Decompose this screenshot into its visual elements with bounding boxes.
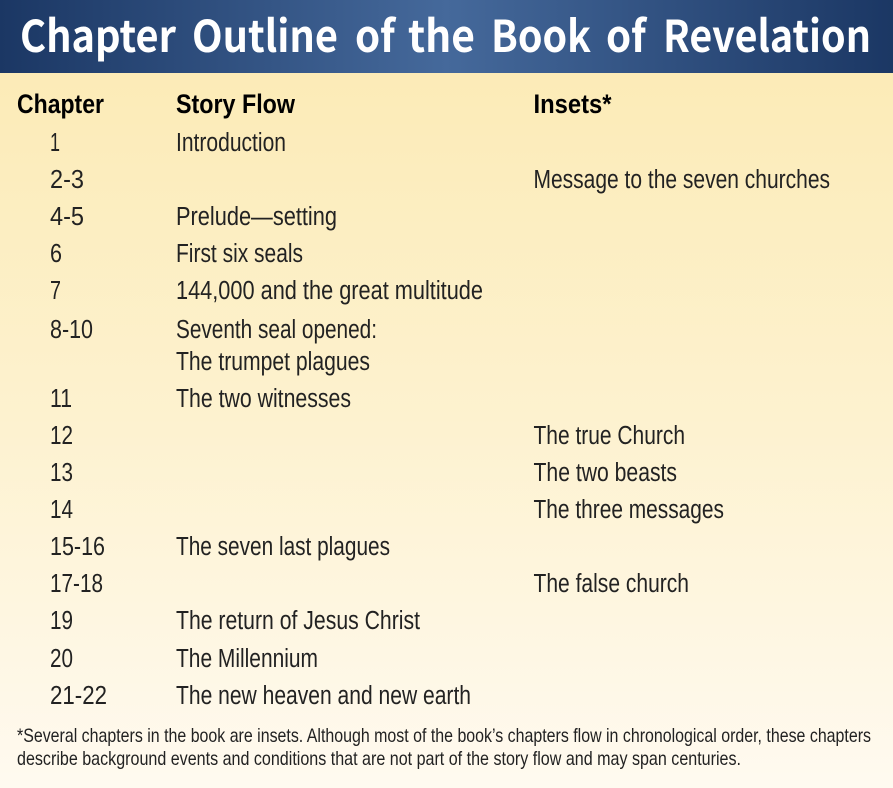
title: Revelation [663, 1, 871, 65]
row: chapters 8-10: The trumpet plagues [176, 348, 370, 376]
row: chapters 21-22: 21-22 [50, 682, 107, 710]
row: chapter 6: 6 [50, 240, 62, 268]
title: Book [491, 1, 591, 65]
row: chapters 4-5: Prelude—setting [176, 203, 337, 231]
row: chapter 6: First six seals [176, 240, 303, 268]
row: chapter 20: The Millennium [176, 645, 318, 673]
row: chapter 13 [50, 459, 677, 487]
row: chapter 1: 1 [50, 129, 60, 157]
row: chapter 19: The return of Jesus Christ [176, 607, 420, 635]
row: chapter 13: 13 [50, 459, 73, 487]
row: chapter 7: 7 [50, 277, 61, 305]
footnote: describe background events and conditions that are not part of the story flow and may span centuries. [17, 748, 741, 770]
row: chapter 1: Introduction [176, 129, 286, 157]
footnote [17, 725, 871, 770]
row: chapters 15-16: The seven last plagues [176, 533, 390, 561]
row: chapters 17-18: 17-18 [50, 570, 103, 598]
row: chapters 4-5 [50, 203, 337, 231]
row: chapters 4-5: 4-5 [50, 203, 84, 231]
row: chapter 11: 11 [50, 385, 72, 413]
row: chapters 8-10: 8-10 [50, 316, 93, 344]
column headings: Chapter [17, 89, 104, 119]
row: chapters 21-22 [50, 682, 471, 710]
title: the [408, 1, 475, 65]
row: chapters 15-16 [50, 533, 390, 561]
title: Chapter [20, 1, 177, 65]
title [20, 1, 871, 65]
row: chapters 17-18 [50, 570, 689, 598]
row: chapters 21-22: The new heaven and new earth [176, 682, 471, 710]
row: chapter 14 [50, 496, 724, 524]
row: chapter 13: The two beasts [534, 459, 677, 487]
row: chapter 19 [50, 607, 420, 635]
row: chapter 19: 19 [50, 607, 73, 635]
title: of [606, 1, 647, 65]
row: chapters 15-16: 15-16 [50, 533, 105, 561]
row: chapter 12: The true Church [534, 422, 685, 450]
row: chapter 6 [50, 240, 303, 268]
row: chapter 14: 14 [50, 496, 73, 524]
column headings [17, 89, 612, 119]
row: chapter 7: 144,000 and the great multitude [176, 277, 483, 305]
title banner [0, 0, 893, 73]
row: chapters 2-3: 2-3 [50, 166, 84, 194]
row: chapter 11 [50, 385, 351, 413]
row: chapters 17-18: The false church [534, 570, 689, 598]
column headings: Story Flow [176, 89, 295, 119]
row: chapter 1 [50, 129, 286, 157]
row: chapters 8-10 [50, 316, 377, 376]
row: chapter 20 [50, 645, 318, 673]
row: chapter 12 [50, 422, 685, 450]
row: chapter 11: The two witnesses [176, 385, 351, 413]
outline table rows [50, 129, 830, 710]
row: chapters 8-10: Seventh seal opened: [176, 316, 377, 344]
column headings: Insets* [534, 89, 612, 119]
row: chapter 14: The three messages [534, 496, 724, 524]
row: chapter 20: 20 [50, 645, 73, 673]
row: chapters 2-3 [50, 166, 830, 194]
row: chapters 2-3: Message to the seven churches [534, 166, 830, 194]
title: of [355, 1, 396, 65]
row: chapter 12: 12 [50, 422, 73, 450]
row: chapter 7 [50, 277, 483, 305]
title: Outline [192, 1, 338, 65]
